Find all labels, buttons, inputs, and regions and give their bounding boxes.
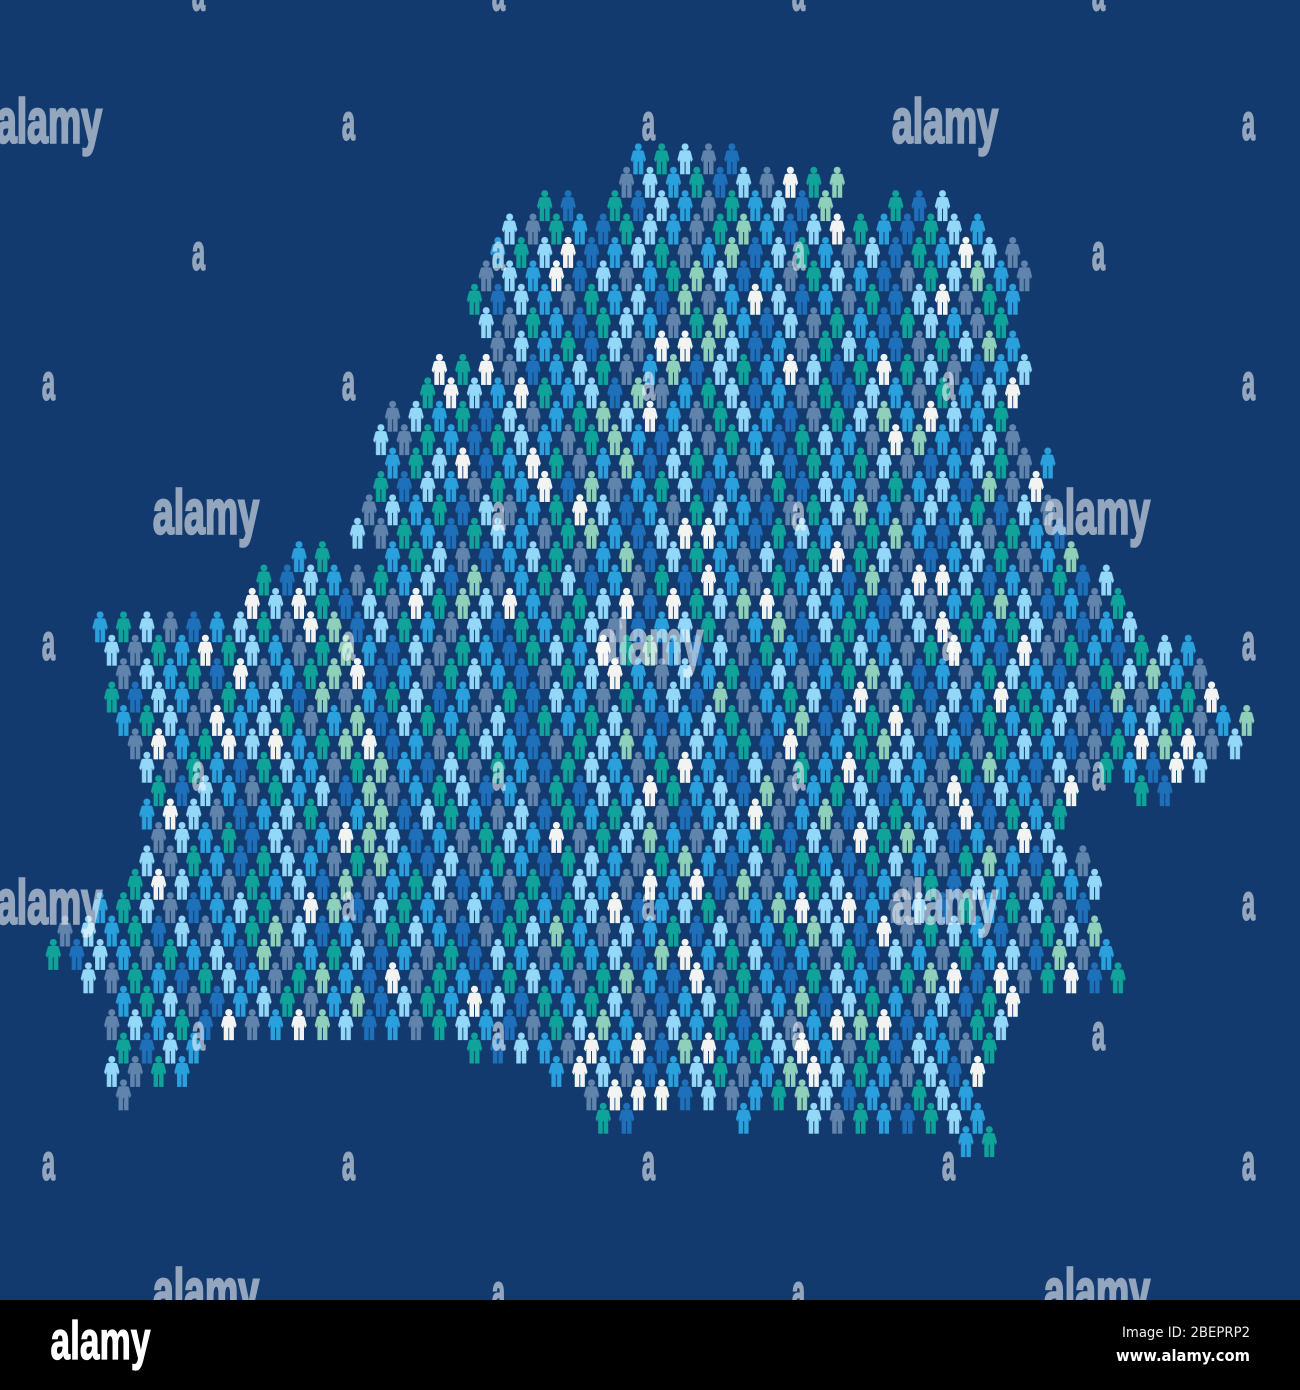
watermark overlay: a [492,224,506,280]
watermark overlay: alamy [892,868,998,938]
watermark overlay: alamy [1044,1258,1150,1326]
watermark overlay: a [1092,224,1106,280]
watermark overlay: a [42,354,56,410]
watermark overlay: alamy [153,478,259,548]
watermark overlay: a [792,744,806,800]
watermark overlay: a [492,1004,506,1060]
watermark overlay: a [642,1134,656,1190]
watermark overlay: a [642,94,656,150]
watermark overlay: a [342,94,356,150]
infographic canvas: a [1242,94,1256,150]
watermark overlay: a [342,354,356,410]
infographic canvas: a [1242,1134,1256,1190]
infographic canvas: a [1242,874,1256,930]
watermark overlay: alamy [892,88,998,156]
watermark overlay: a [492,484,506,540]
watermark overlay: a [492,744,506,800]
watermark overlay: a [42,1134,56,1190]
watermark overlay: a [792,224,806,280]
watermark overlay: a [342,874,356,930]
watermark overlay: a [42,614,56,670]
watermark overlay: a [192,1004,206,1060]
map of Belarus built from rows of coloured people [42,143,1258,1158]
infographic canvas: a [1242,614,1256,670]
watermark overlay: a [192,744,206,800]
watermark overlay: alamy [1044,478,1150,548]
watermark overlay: a [792,484,806,540]
website address: www.alamy.com [1116,1346,1250,1365]
image id: Image ID: 2BEPRP2 [1122,1325,1250,1341]
watermark overlay: a [642,874,656,930]
footer logo: alamy [50,1311,150,1371]
watermark overlay: a [192,224,206,280]
watermark overlay: a [342,614,356,670]
watermark overlay: a [1092,744,1106,800]
watermark overlay: alamy [0,868,102,938]
watermark overlay: a [1092,1004,1106,1060]
watermark overlay: alamy [597,608,703,678]
watermark overlay: a [792,1004,806,1060]
watermark overlay: alamy [153,1258,259,1326]
watermark overlay: a [942,1134,956,1190]
watermark overlay: a [942,354,956,410]
infographic canvas: a [1242,354,1256,410]
watermark overlay: a [642,354,656,410]
watermark overlay: a [342,1134,356,1190]
watermark overlay: a [792,1264,806,1320]
watermark overlay: alamy [0,88,102,156]
watermark overlay: a [942,614,956,670]
watermark overlay: a [492,1264,506,1320]
highlighted white figures [151,167,1219,1110]
footer bar [0,1300,1300,1390]
